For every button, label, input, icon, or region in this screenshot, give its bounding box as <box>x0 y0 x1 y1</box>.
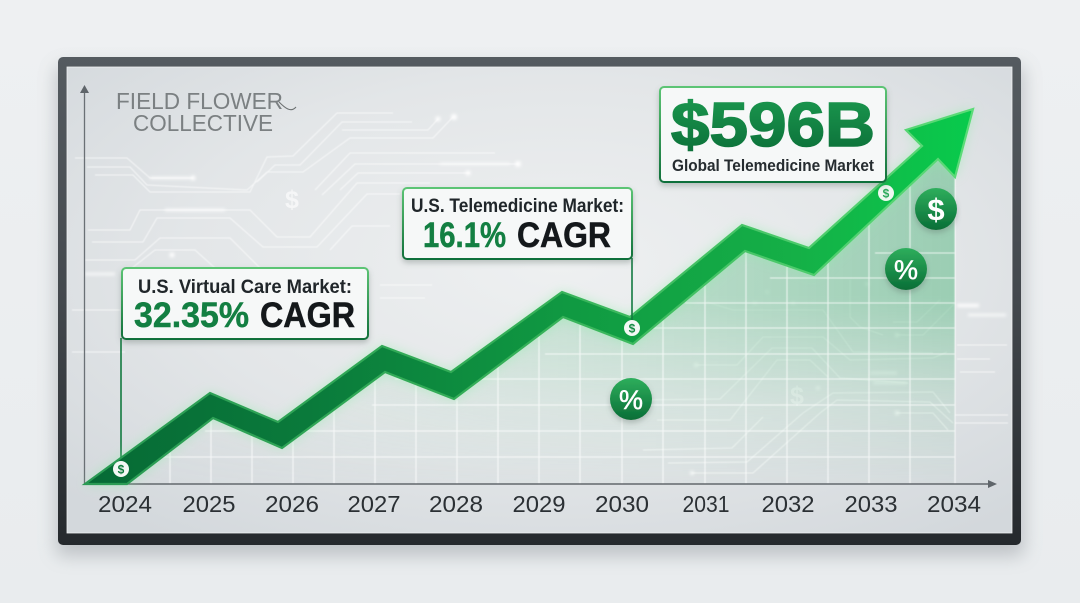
logo: Field Flower Collective <box>116 88 296 136</box>
marker: dollar 2030: $ <box>629 322 636 336</box>
x axis year labels: 2032 <box>762 491 814 517</box>
icon: dollar badge: $ <box>927 192 945 227</box>
callout leader line: 2024 <box>120 338 122 462</box>
x axis with arrowhead <box>84 480 997 488</box>
decorative circuit traces <box>72 113 1008 473</box>
callout: U.S. Telemedicine Market: U.S. Telemedicine Market: <box>411 196 624 217</box>
icon: percent badge upper <box>885 248 927 290</box>
marker: dollar 2033 <box>878 185 894 201</box>
x axis year labels: 2034 <box>927 491 981 517</box>
logo: Field Flower Collective: COLLECTIVE <box>133 110 273 136</box>
marker: dollar 2030 <box>624 320 640 336</box>
callout: U.S. Virtual Care Market: 32.35% <box>134 296 249 335</box>
screen panel <box>67 67 1012 533</box>
x axis year labels: 2027 <box>348 491 400 517</box>
marker: dollar 2024: $ <box>118 462 125 476</box>
x axis year labels: 2030 <box>595 491 649 517</box>
callout: $596B Global Telemedicine Market: Global Telemedicine Market <box>672 156 874 175</box>
callout: U.S. Telemedicine Market: 16.1% <box>423 216 506 255</box>
callout leader line: 2030 <box>631 258 633 320</box>
callout: $596B Global Telemedicine Market <box>660 87 886 182</box>
x axis year labels: 2031 <box>682 491 730 517</box>
decorative glow nodes <box>85 114 1006 475</box>
x axis year labels: 2025 <box>182 491 236 517</box>
callout: U.S. Telemedicine Market <box>403 188 632 259</box>
icon: percent badge lower <box>610 378 652 420</box>
faint dollar sign in lower right: $ <box>790 382 804 410</box>
logo: Field Flower Collective: FIELD FLOWER <box>116 88 283 114</box>
marker: dollar 2024 <box>113 461 129 477</box>
chart grid <box>150 177 955 484</box>
icon: dollar badge <box>915 188 957 230</box>
x axis year labels: 2028 <box>429 491 483 517</box>
trend arrow <box>85 109 973 484</box>
display frame <box>56 57 1024 556</box>
infographic: telemedicine market growth on a display screen <box>47 57 1033 566</box>
icon: percent badge upper: % <box>894 255 918 285</box>
marker: dollar 2033: $ <box>883 186 890 200</box>
callout: U.S. Telemedicine Market: CAGR <box>517 216 611 255</box>
x axis year labels: 2029 <box>512 491 566 517</box>
faint background dollar sign: $ <box>285 186 299 214</box>
callout: U.S. Virtual Care Market: U.S. Virtual Care Market: <box>138 277 352 298</box>
x axis year labels <box>98 491 981 517</box>
callout: $596B Global Telemedicine Market: $596B <box>671 91 875 160</box>
chart: growth area under the trend arrow <box>363 160 955 460</box>
callout: U.S. Virtual Care Market <box>122 268 368 339</box>
callout: U.S. Virtual Care Market: CAGR <box>260 296 355 335</box>
y axis with arrowhead <box>80 85 89 484</box>
icon: percent badge lower: % <box>619 385 643 415</box>
x axis year labels: 2033 <box>844 491 898 517</box>
x axis year labels: 2026 <box>265 491 319 517</box>
x axis year labels: 2024 <box>98 491 152 517</box>
